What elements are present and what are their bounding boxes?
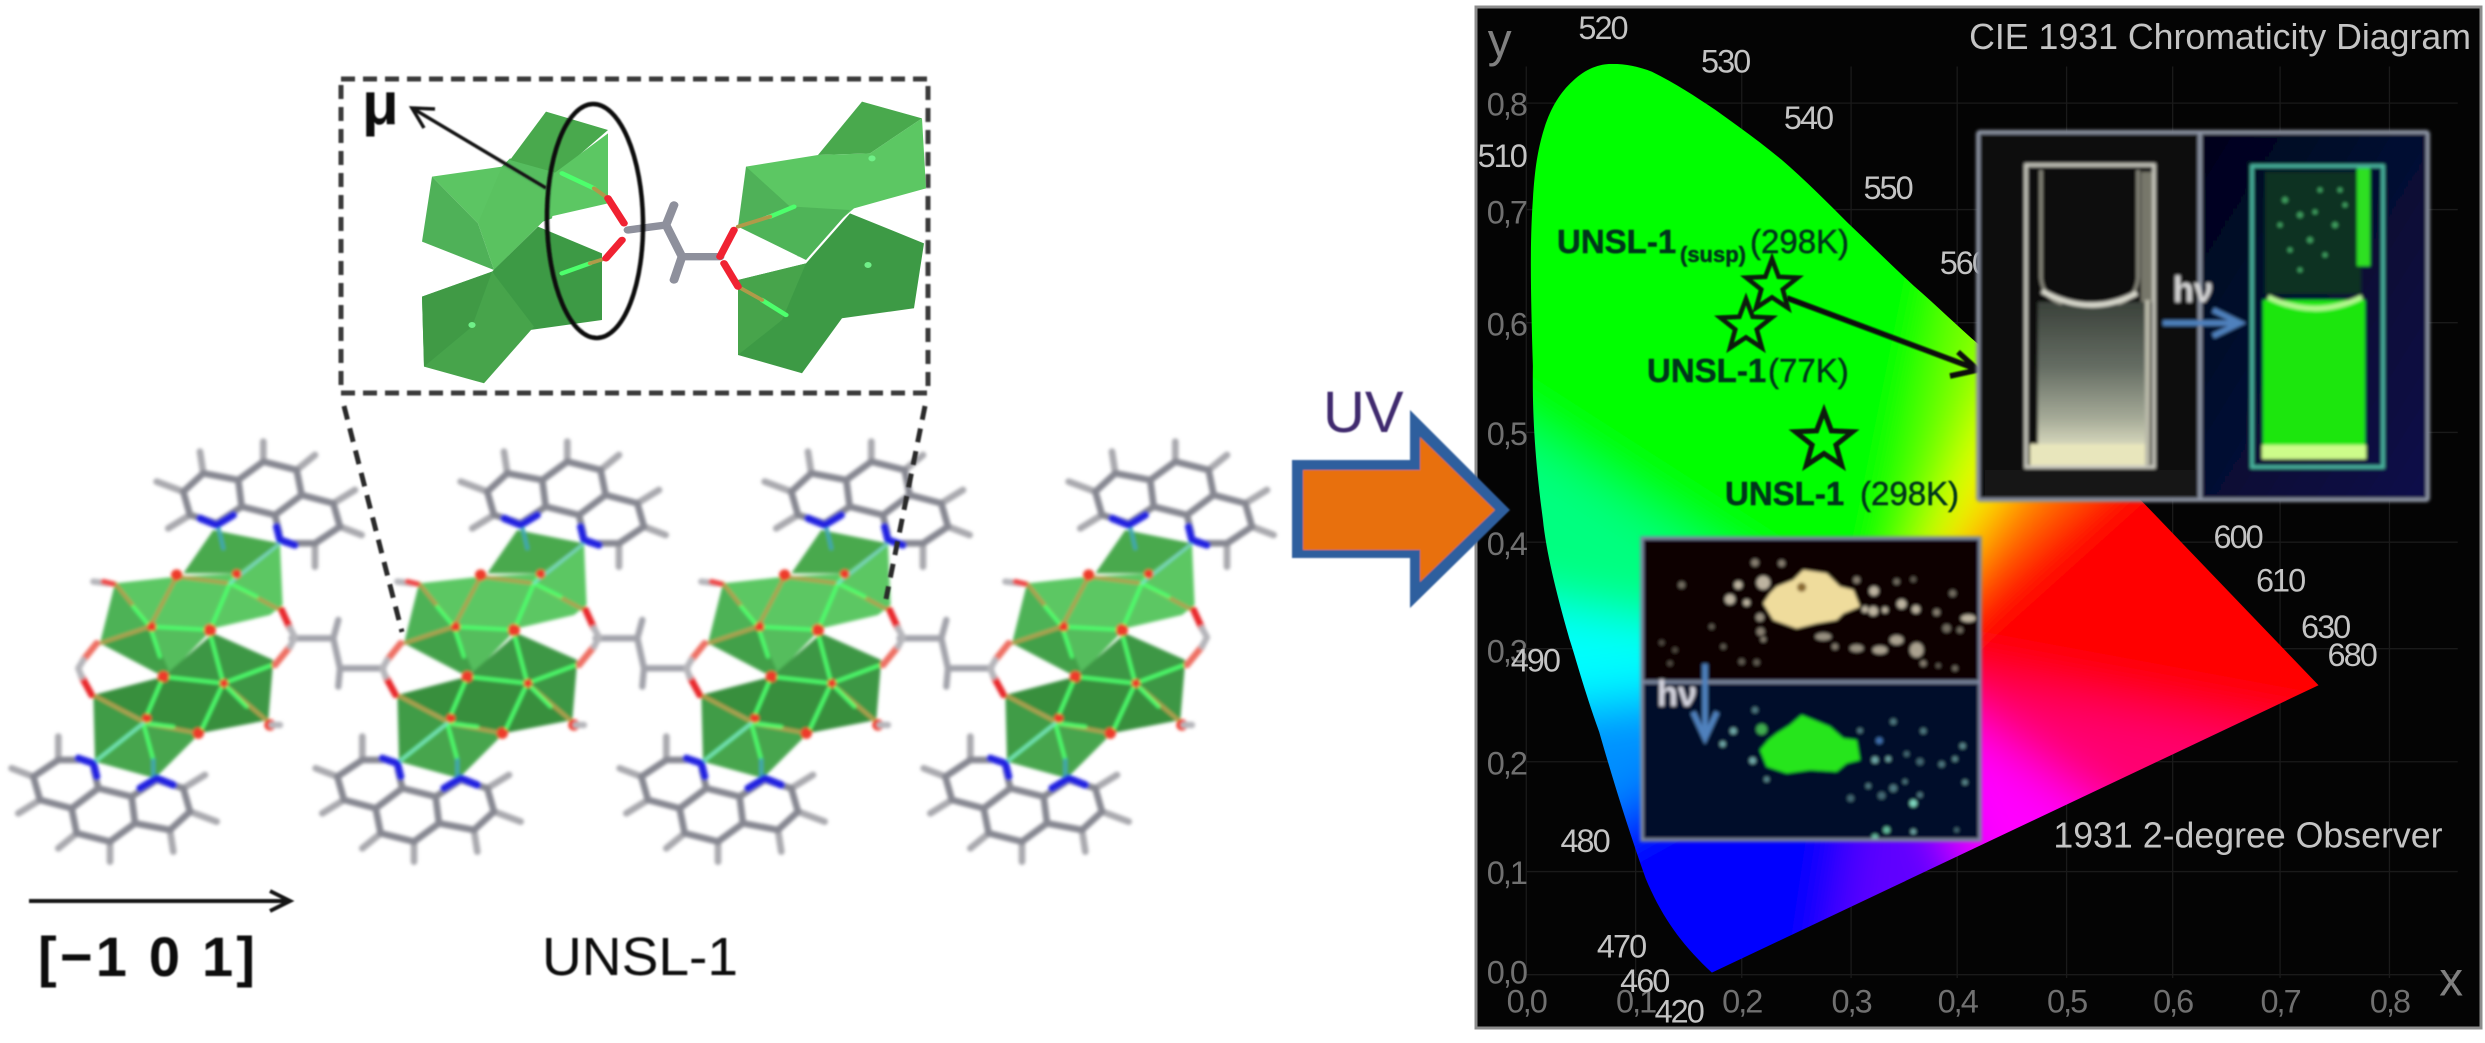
diagram title: CIE 1931 Chromaticity Diagram (1969, 17, 2471, 57)
wavelength labels: 560 (1940, 245, 1989, 281)
sample labels (1557, 223, 1959, 512)
panel: CIE 1931 chromaticity diagram (1474, 6, 2482, 1030)
wavelength labels: 470 (1597, 928, 1646, 964)
wavelength labels (1478, 10, 2377, 1030)
label: 77K: (77K) (1768, 352, 1849, 389)
chromaticity gamut horseshoe (1530, 64, 2318, 972)
axis letter x: x (2439, 953, 2463, 1006)
direction arrow (29, 891, 290, 911)
chain unit 1 (12, 442, 383, 862)
dashed connector right (886, 406, 925, 599)
dashed connector left (344, 406, 402, 632)
axis tick labels: 0,7 (1487, 194, 1527, 231)
star markers (1720, 259, 1853, 465)
label: mu: μ (362, 70, 399, 137)
wavelength labels: 460 (1620, 963, 1669, 999)
axis tick labels (1487, 87, 2410, 1020)
chain unit 3 (620, 442, 991, 862)
observer label: 1931 2-degree Observer (2053, 816, 2443, 856)
wavelength labels: 490 (1511, 642, 1560, 678)
wavelength labels: 520 (1578, 10, 1627, 46)
wavelength labels: 540 (1784, 100, 1833, 136)
wavelength labels: 680 (2328, 637, 2377, 673)
left polyhedra (422, 112, 608, 383)
axis tick labels: 0,2 (1722, 984, 1762, 1020)
axis tick labels: 0,0 (1487, 954, 1527, 990)
cuvette under UV (2200, 132, 2428, 500)
wavelength labels: 480 (1560, 823, 1610, 859)
arrow to mu label (412, 108, 546, 188)
arrow star to cuvette (1787, 298, 1978, 376)
inset: paddlewheel polyhedra (422, 102, 926, 383)
axis letter y: y (1488, 14, 1512, 68)
chain unit 2 (316, 442, 687, 862)
axis tick labels: 0,0 (1507, 984, 1547, 1020)
label: direction: [−1 0 1] (38, 925, 255, 988)
photo frame (1642, 538, 1980, 840)
UV arrow (1292, 410, 1510, 608)
label hv: hν (1657, 673, 1697, 714)
chain unit 4 (924, 442, 1274, 862)
label: UV: UV (1323, 380, 1404, 445)
axis tick labels: 0,3 (1832, 984, 1872, 1020)
label: suspension 298K: UNSL-1 (1557, 223, 1676, 260)
inset: dashed zoom box (341, 79, 928, 393)
axis tick labels: 0,1 (1616, 984, 1656, 1020)
ellipse highlighting bridging oxygens (545, 103, 645, 339)
label: 298K: (298K) (1860, 475, 1959, 512)
axis tick labels: 0,4 (1938, 984, 1979, 1020)
axis tick labels: 0,8 (1487, 87, 1527, 123)
wavelength labels: 600 (2214, 519, 2263, 555)
label: 77K: UNSL-1 (1647, 352, 1766, 389)
axis tick labels: 0,7 (2260, 984, 2301, 1020)
axis tick labels: 0,6 (1487, 306, 1527, 342)
wavelength labels: 630 (2301, 609, 2350, 645)
wavelength labels: 610 (2256, 562, 2305, 598)
axis tick labels: 0,2 (1487, 745, 1527, 781)
label hv: hν (2173, 269, 2213, 310)
right polyhedra (738, 102, 926, 373)
wavelength labels: 420 (1655, 994, 1704, 1030)
axis tick labels: 0,5 (2047, 984, 2087, 1020)
axis tick labels: 0,8 (2370, 984, 2410, 1020)
grid (1526, 67, 2458, 978)
arrow hv blue (2163, 310, 2240, 336)
label: UNSL-1: UNSL-1 (542, 927, 738, 987)
wavelength labels: 550 (1863, 170, 1913, 206)
photo frame (1978, 132, 2428, 500)
axis tick labels: 0,5 (1487, 416, 1527, 452)
label: suspension 298K: (298K) (1750, 223, 1849, 260)
axis tick labels: 0,4 (1487, 526, 1528, 562)
bridging carboxylate ligand (468, 155, 876, 328)
powder daylight (1642, 538, 1980, 682)
wavelength labels: 510 (1478, 138, 1527, 174)
label: suspension 298K: (susp) (1680, 242, 1746, 267)
panel: UNSL-1 crystal structure (12, 70, 1274, 988)
wavelength labels: 530 (1701, 43, 1750, 80)
cuvette daylight (1978, 132, 2200, 500)
arrow hv blue (1693, 664, 1717, 738)
axis tick labels: 0,6 (2153, 984, 2193, 1020)
1D coordination chain (12, 442, 1274, 862)
label: 298K: UNSL-1 (1725, 475, 1844, 512)
axis tick labels: 0,1 (1487, 855, 1527, 891)
powder under UV (1642, 682, 1980, 841)
axis tick labels: 0,3 (1487, 634, 1527, 670)
photo: cuvettes (1978, 132, 2428, 500)
photo: powder (1642, 538, 1980, 841)
